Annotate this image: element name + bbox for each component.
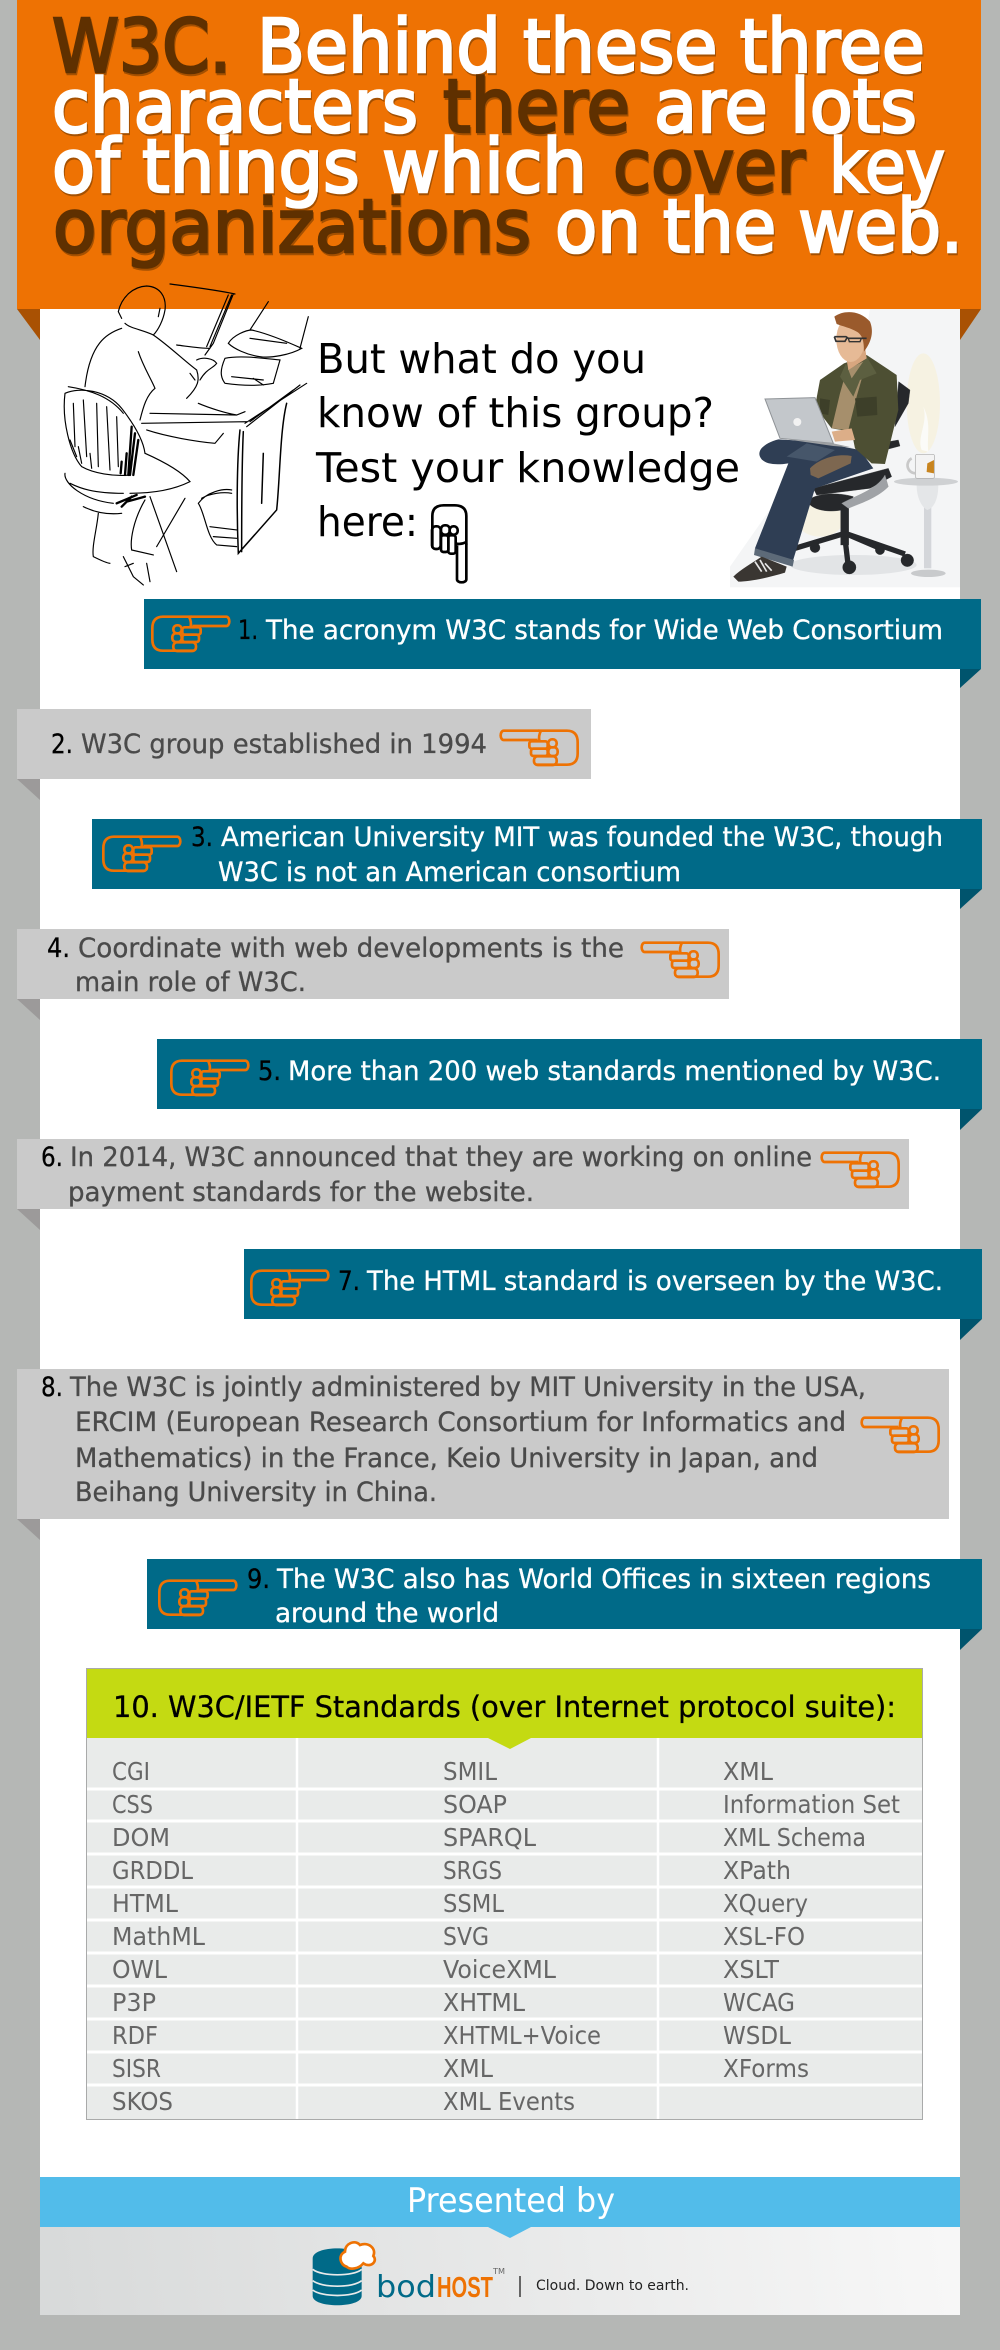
column 2: VoiceXML [443,1955,556,1984]
icon: pointing hand [822,1153,899,1187]
column 3 [723,1757,900,2083]
icon: pointing hand [642,943,719,977]
panel: fact 9: around the world [275,1598,499,1629]
icon: pointing hand [501,731,578,765]
panel: fact 6 [17,1139,909,1230]
panel: fact 5: More than 200 web standards mentioned by W3C. [288,1056,941,1087]
column 3: WCAG [723,1988,795,2017]
panel: fact 9: The W3C also has World Offices in sixteen regions [276,1564,931,1595]
logo: bodHOST: TM [492,2267,505,2276]
panel: fact 3: W3C is not an American consortium [218,857,681,888]
panel: fact 2: W3C group established in 1994 [81,729,487,760]
title: are lots [654,64,917,150]
white content panel [40,300,960,2315]
column 2 [443,1757,601,2116]
column 2: XML [443,2054,493,2083]
column 1: GRDDL [112,1856,193,1885]
column 2: SOAP [443,1790,507,1819]
panel: fact 1: The acronym W3C stands for Wide Web Consortium [265,615,943,646]
panel: fact 3: American University MIT was founded the W3C, though [221,822,943,853]
panel: fact 5: 5. [258,1056,281,1087]
icon: pointing hand [159,1581,236,1615]
panel: fact 1 [144,599,981,688]
presented by banner [40,2177,960,2238]
column 1: OWL [112,1955,167,1984]
head [845,347,867,370]
column 1: CSS [112,1790,153,1819]
icon: pointing hand [862,1418,939,1452]
panel: fact 7 [244,1249,982,1340]
title: of things which [52,124,587,210]
intro question text [315,335,740,546]
icon: pointing hand [251,1271,328,1305]
column 3: XForms [723,2054,809,2083]
panel: fact 6: In 2014, W3C announced that they are working on online [70,1142,812,1173]
column 2: XML Events [443,2087,575,2116]
column 3: Information Set [723,1790,900,1819]
logo: bodHOST: Cloud. Down to earth. [536,2278,689,2294]
chair [795,382,914,574]
column 3: XSL-FO [723,1922,805,1951]
column 3: XPath [723,1856,791,1885]
panel: standards table [86,1668,922,2120]
icon: pointing hand [152,617,229,651]
laptop [765,398,833,443]
column 2: SPARQL [443,1823,536,1852]
icon: hand pointing down [432,505,466,582]
title: Behind these three [257,4,925,90]
jacket [815,355,898,464]
header banner [17,0,981,340]
intro question text: here: [317,498,418,546]
title: W3C. [52,4,231,90]
shoes [733,557,787,582]
panel: fact 2: 2. [51,729,73,760]
panel: fact 4: Coordinate with web developments is the [78,933,624,964]
column 3: XQuery [723,1889,808,1918]
panel: fact 4: 4. [47,933,70,964]
column 3: XML [723,1757,773,1786]
presented by banner: Presented by [407,2181,615,2221]
column 2: SMIL [443,1757,497,1786]
logo: bodHOST: bod [376,2270,436,2305]
title [52,4,963,270]
logo: bodHOST: HOST [437,2272,493,2304]
panel: fact 4 [17,929,729,1020]
panel: fact 9: 9. [247,1564,270,1595]
column 3: XML Schema [723,1823,866,1852]
panel: fact 9 [147,1559,982,1650]
column 1: MathML [112,1922,205,1951]
panel: fact 6: 6. [41,1142,63,1173]
column 2: XHTML [443,1988,525,2017]
panel: fact 8: Mathematics) in the France, Keio University in Japan, and [75,1443,818,1474]
title: characters [52,64,418,150]
column 1: HTML [112,1889,178,1918]
column 1: RDF [112,2021,158,2050]
column 1: DOM [112,1823,170,1852]
column 2: SVG [443,1922,489,1951]
table heading: 10. W3C/IETF Standards (over Internet protocol suite): [113,1690,896,1724]
title: on the web. [555,184,963,270]
panel: fact 8 [17,1369,949,1540]
panel: fact 7: 7. [338,1266,360,1297]
panel: fact 5 [157,1039,982,1130]
panel: fact 8: 8. [41,1372,63,1403]
panel: fact 1: 1. [238,615,258,646]
title: organizations [53,184,531,270]
column 1: SKOS [112,2087,173,2116]
column 2: XHTML+Voice [443,2021,601,2050]
title: cover [613,124,806,210]
panel: fact 2 [17,709,591,800]
logo: bodHOST [313,2242,689,2305]
footer logo panel [40,2227,960,2315]
panel: fact 3: 3. [191,822,213,853]
column 2: SSML [443,1889,504,1918]
icon: pointing hand [171,1061,248,1095]
column 1: CGI [112,1757,150,1786]
column 1 [112,1757,205,2116]
panel: fact 8: The W3C is jointly administered by MIT University in the USA, [69,1372,866,1403]
column 1: SISR [112,2054,161,2083]
column 1: P3P [112,1988,156,2017]
title: key [829,124,945,210]
icon: database with cloud [313,2242,375,2305]
table [894,407,958,577]
panel: fact 3 [92,819,982,909]
panel: fact 8: ERCIM (European Research Consortium for Informatics and [75,1407,846,1438]
title: there [443,64,630,150]
illustration: man with laptop [730,309,960,587]
panel: fact 7: The HTML standard is overseen by the W3C. [366,1266,943,1297]
column 3: XSLT [723,1955,780,1984]
icon: pointing hand [103,837,180,871]
intro question text: Test your knowledge [315,444,740,492]
panel: fact 6: payment standards for the website. [68,1177,534,1208]
icon: sketch of person at desk [64,284,308,585]
column 3: WSDL [723,2021,791,2050]
trousers [755,439,873,565]
panel: fact 8: Beihang University in China. [75,1477,437,1508]
table heading [87,1669,922,1749]
intro question text: know of this group? [317,389,714,437]
intro question text: But what do you [317,335,646,383]
column 2: SRGS [443,1856,502,1885]
panel: fact 4: main role of W3C. [75,967,306,998]
